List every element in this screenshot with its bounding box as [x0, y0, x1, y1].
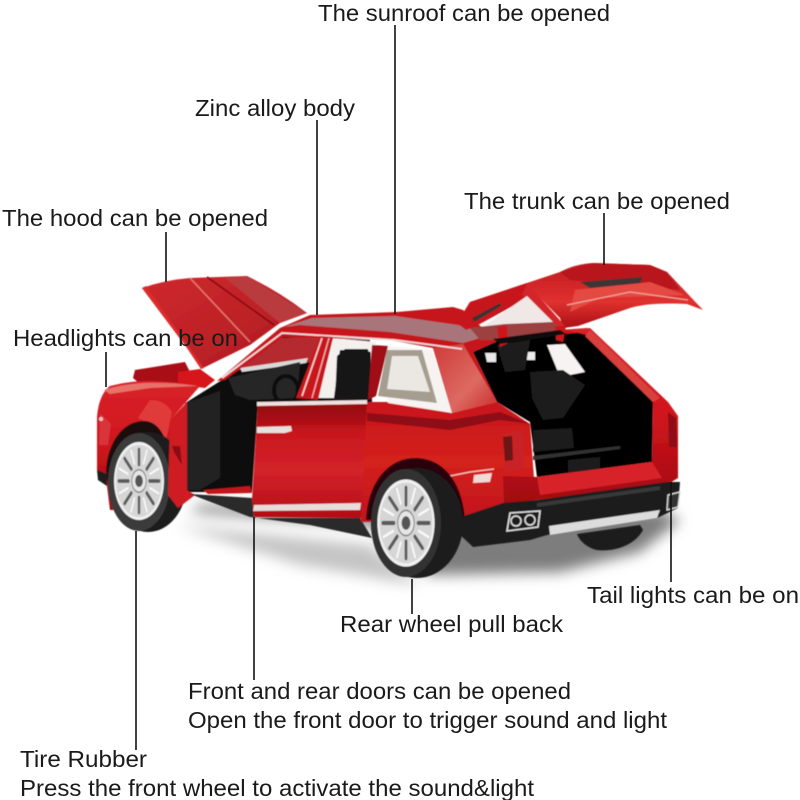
cabin interior and opening	[187, 336, 376, 492]
open tailgate	[457, 263, 703, 340]
label: doors	[188, 678, 668, 733]
leader: doors	[253, 517, 255, 680]
label: sunroof: The sunroof can be opened	[318, 0, 610, 26]
front fender	[97, 381, 200, 510]
rear wheel arch	[366, 458, 465, 520]
exhaust tips	[507, 492, 680, 531]
leader lines	[106, 25, 671, 750]
front wheel arch	[106, 421, 175, 530]
side reflector	[473, 473, 492, 483]
leader: trunk	[603, 213, 605, 265]
label: tire rubber: Tire Rubber	[20, 746, 147, 772]
front door	[252, 400, 367, 518]
leader: hood	[165, 232, 167, 282]
label: headlights: Headlights can be on	[13, 325, 238, 351]
front wheel rim	[115, 444, 163, 518]
label: doors: Open the front door to trigger sound and light	[188, 707, 668, 733]
engine bay	[133, 362, 215, 388]
front tyre	[108, 432, 187, 532]
rear side window	[368, 345, 452, 413]
leader: tire rubber	[135, 531, 137, 750]
label: tire rubber	[20, 746, 535, 800]
hood	[142, 276, 307, 369]
leader: sunroof	[394, 25, 396, 314]
label: zinc alloy body: Zinc alloy body	[195, 95, 356, 121]
label: trunk: The trunk can be opened	[464, 188, 730, 214]
trunk opening	[473, 332, 653, 477]
leader: tail lights	[670, 482, 672, 582]
ground shadow	[175, 505, 680, 585]
roof and pillar	[217, 307, 590, 413]
label: doors: Front and rear doors can be opened	[188, 678, 571, 704]
leader: zinc alloy body	[316, 120, 318, 315]
label: hood: The hood can be opened	[2, 205, 268, 231]
toy car	[97, 263, 703, 578]
leader: rear wheel	[411, 579, 413, 614]
trunk frame and sill	[503, 328, 678, 504]
far rear wheel	[577, 525, 643, 550]
label: tail lights: Tail lights can be on	[587, 582, 799, 608]
rear bumper	[455, 482, 680, 547]
rear fender and side panel	[361, 402, 540, 522]
tailgate struts	[493, 325, 566, 347]
label: rear wheel: Rear wheel pull back	[340, 611, 564, 637]
leader: headlights	[105, 352, 107, 387]
door sill	[190, 486, 372, 538]
rear wheel	[371, 468, 463, 578]
open front door inner panel	[168, 391, 220, 508]
tail lamp	[502, 430, 525, 472]
rear wheel rim	[378, 481, 434, 565]
